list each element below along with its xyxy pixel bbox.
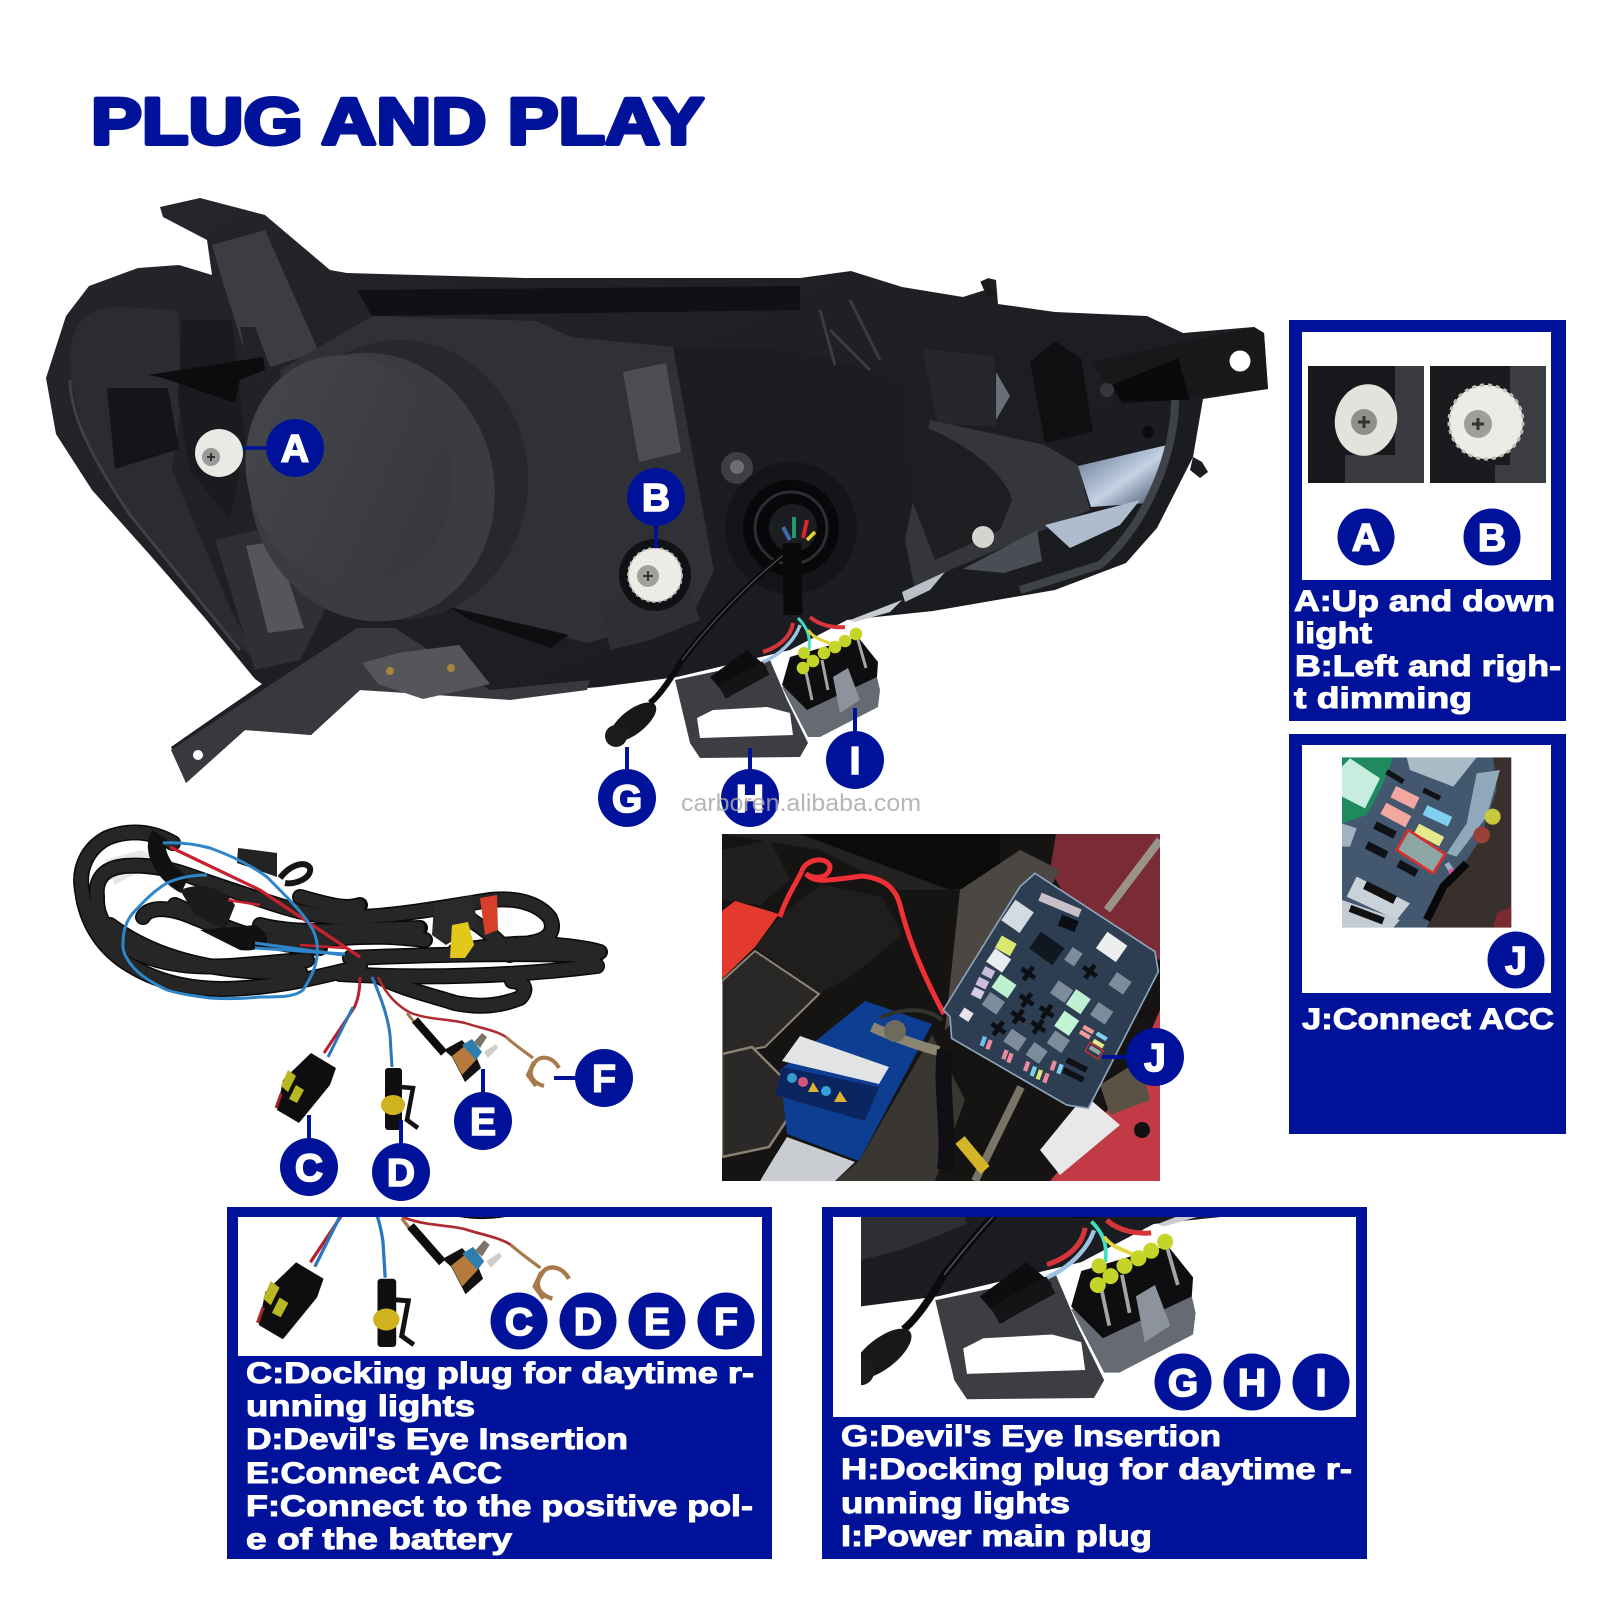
inset photo J: [1342, 757, 1511, 928]
text: C D E F description: unning lights: [246, 1390, 475, 1423]
badge F: [575, 1049, 633, 1107]
badge A: [266, 419, 324, 477]
leader H: [748, 748, 752, 775]
badge J small: [1488, 932, 1544, 988]
badge B: [627, 468, 685, 526]
badge G: G: [612, 778, 642, 821]
badge I: [826, 731, 884, 789]
title: PLUG AND PLAY: [91, 84, 704, 158]
text: C D E F description: D:Devil's Eye Insertion: [246, 1423, 628, 1456]
text: G H I description: unning lights: [841, 1487, 1070, 1520]
badge I small: I: [1316, 1362, 1326, 1405]
leader J: [1102, 1055, 1130, 1059]
leader A: [243, 446, 270, 450]
badge E: E: [470, 1101, 496, 1144]
badge J small: J: [1505, 940, 1527, 983]
inset headlight connectors: [861, 1217, 1220, 1400]
text: G H I description: G:Devil's Eye Insertion: [841, 1420, 1221, 1453]
text: C D E F description: E:Connect ACC: [246, 1457, 502, 1490]
badge I: I: [850, 740, 860, 783]
panel: A B adjusters: [1289, 320, 1566, 721]
leader B: [654, 520, 658, 548]
badge C: [280, 1138, 338, 1196]
wiring harness: [81, 833, 600, 1130]
badge C small: C: [505, 1301, 533, 1344]
badge F small: [698, 1292, 754, 1350]
badge E: [454, 1092, 512, 1150]
panel: G H I: [822, 1207, 1367, 1559]
text: J description: J:Connect ACC: [1302, 1003, 1554, 1036]
text: A B description: t dimming: [1294, 682, 1472, 715]
inset photo A: [1308, 366, 1424, 483]
text: C D E F description: e of the battery: [246, 1523, 512, 1556]
badge J: [1126, 1028, 1184, 1086]
badge D: [372, 1143, 430, 1201]
text: C D E F description: C:Docking plug for daytime r-: [246, 1357, 754, 1390]
badge B small: B: [1478, 517, 1506, 560]
text: G H I description: I:Power main plug: [841, 1520, 1152, 1553]
badge C small: [490, 1292, 548, 1350]
badge B: B: [642, 477, 670, 520]
badge G small: G: [1168, 1362, 1198, 1405]
fuse box: [943, 873, 1158, 1108]
inset photo B: [1430, 366, 1546, 483]
badge G: [598, 769, 656, 827]
engine bay photo: [722, 834, 1160, 1181]
badge H: [721, 769, 779, 827]
leader I: [853, 708, 857, 735]
badge G small: [1154, 1354, 1212, 1410]
badge D small: [560, 1292, 616, 1350]
badge D: D: [387, 1152, 415, 1195]
text: C D E F description: [246, 1357, 754, 1556]
badge C: C: [295, 1147, 323, 1190]
badge F small: F: [714, 1301, 738, 1344]
text: G H I description: [841, 1420, 1352, 1553]
badge H small: [1224, 1354, 1280, 1410]
badge A small: [1338, 508, 1394, 566]
text: A B description: [1294, 585, 1561, 715]
leader G: [625, 747, 629, 775]
badge A small: A: [1352, 517, 1380, 560]
badge D small: D: [574, 1301, 602, 1344]
text: A B description: A:Up and down: [1294, 585, 1555, 618]
panel: C D E F: [227, 1207, 772, 1559]
leader F: [554, 1076, 580, 1080]
leader D: [399, 1120, 403, 1145]
panel: J fuse: [1289, 734, 1566, 1134]
headlight rear view: [46, 198, 1268, 783]
badge H small: H: [1238, 1362, 1266, 1405]
badge E small: [628, 1292, 686, 1350]
text: G H I description: H:Docking plug for daytime r-: [841, 1453, 1352, 1486]
inset harness connectors: [256, 1217, 571, 1347]
badge A: A: [281, 428, 309, 471]
badge B small: [1464, 508, 1520, 566]
badge E small: E: [644, 1301, 670, 1344]
watermark: carboren.alibaba.com: [681, 790, 921, 817]
text: C D E F description: F:Connect to the positive pol-: [246, 1490, 753, 1523]
badge I small: [1292, 1354, 1350, 1410]
text: A B description: light: [1295, 617, 1372, 650]
badge F: F: [592, 1058, 616, 1101]
text: A B description: B:Left and righ-: [1295, 650, 1561, 683]
leader C: [307, 1115, 311, 1140]
leader E: [481, 1069, 485, 1095]
badge H: H: [736, 778, 764, 821]
badge J: J: [1144, 1037, 1166, 1080]
